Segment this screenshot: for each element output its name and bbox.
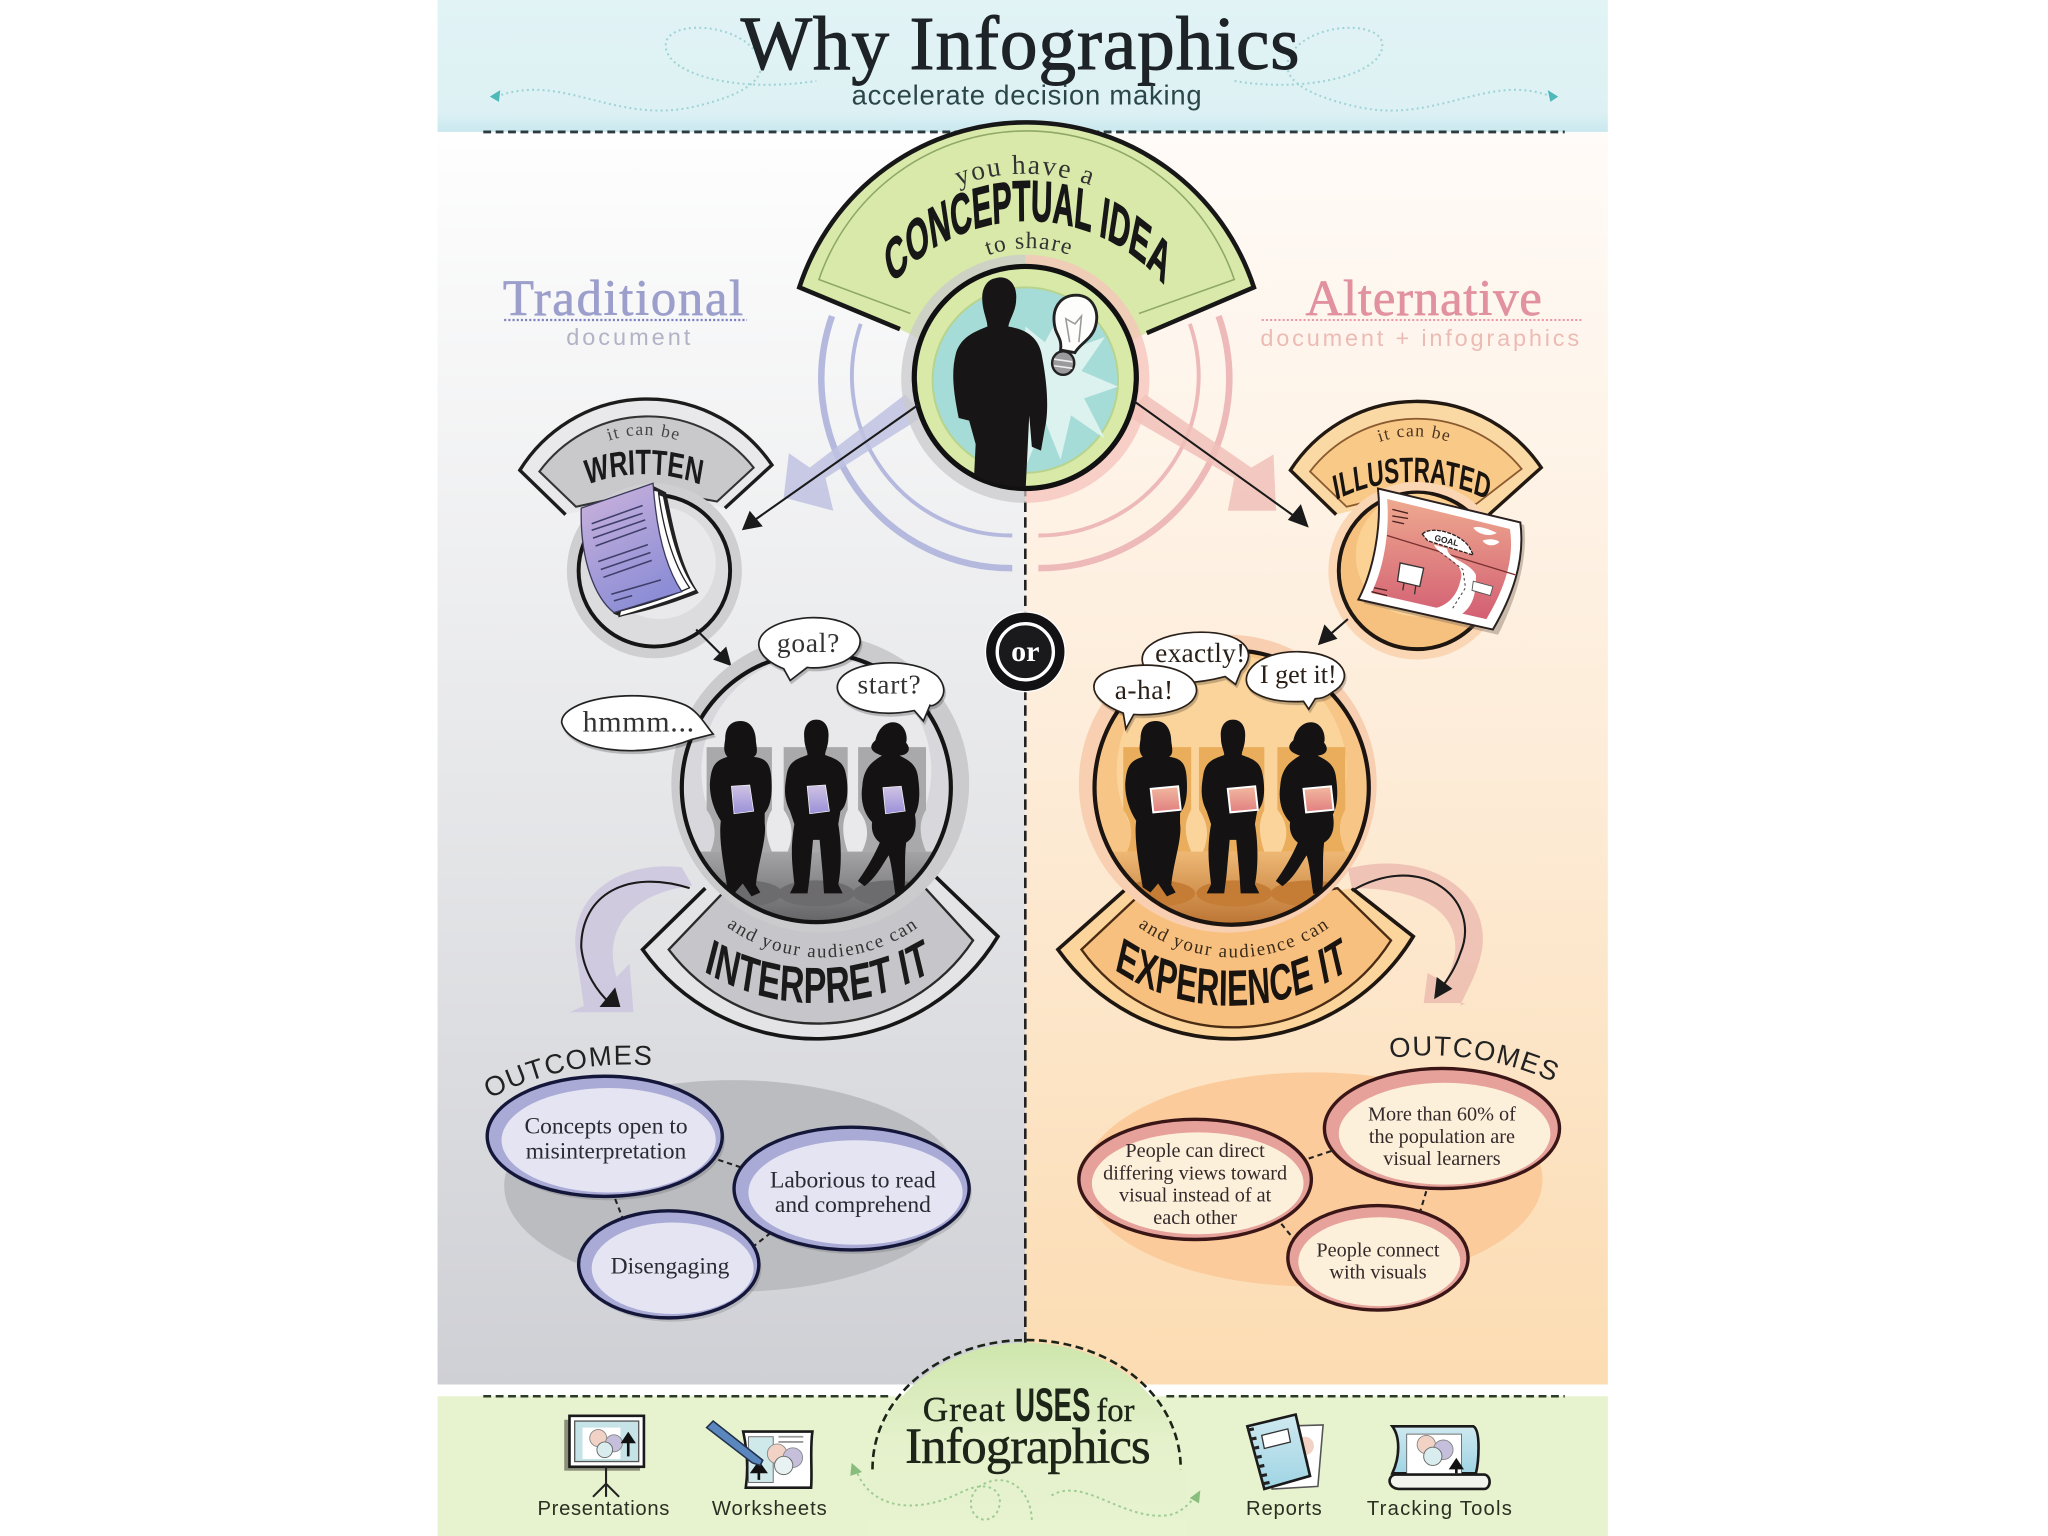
bubble: more than 60 percent xyxy=(1324,1068,1560,1189)
outcomes heading right: OUTCOMES xyxy=(1390,1036,1558,1080)
idea medallion xyxy=(901,255,1149,503)
bubble: concepts xyxy=(487,1076,725,1200)
text: written: WRITTEN xyxy=(583,450,704,484)
seats xyxy=(1123,747,1345,852)
outcomes cluster right xyxy=(1079,1068,1560,1310)
bubble: people connect xyxy=(1288,1206,1468,1310)
sign left xyxy=(1398,563,1424,594)
footer dome xyxy=(850,1340,1200,1536)
decorative header swirl left xyxy=(496,28,816,111)
bubble: people can direct: People can direct xyxy=(1125,1140,1265,1162)
soft curved arrow left xyxy=(569,866,692,1012)
label: tracking tools: Tracking Tools xyxy=(1367,1498,1512,1520)
starburst xyxy=(1025,313,1118,468)
bubble: disengaging xyxy=(579,1211,761,1322)
thin arrow illustrated to audience xyxy=(1318,619,1348,645)
bubble: hmmm xyxy=(562,696,713,751)
person two xyxy=(1202,720,1264,893)
heading: alternative xyxy=(1260,271,1583,351)
bubble: goal xyxy=(759,618,860,680)
bubble: people can direct: visual instead of at xyxy=(1119,1185,1272,1207)
bubble: i get it: I get it! xyxy=(1260,660,1337,689)
icon: reports xyxy=(1247,1415,1323,1489)
books xyxy=(1151,786,1334,812)
icon: tracking tools xyxy=(1390,1426,1490,1489)
bubble: start: start? xyxy=(857,670,922,700)
poster icon xyxy=(1358,488,1525,635)
background panel: traditional xyxy=(438,131,1025,1384)
subtitle: accelerate decision making xyxy=(852,79,1202,110)
header band xyxy=(438,0,1608,132)
heading: traditional: Traditional xyxy=(503,271,743,327)
person one xyxy=(1125,721,1187,896)
written banner xyxy=(518,397,774,516)
bubble: concepts: misinterpretation xyxy=(526,1139,687,1165)
thin arrow right xyxy=(1134,401,1309,528)
text: it can be: it can be xyxy=(607,424,679,440)
bubble: laborious: and comprehend xyxy=(775,1192,931,1218)
person one xyxy=(710,721,772,896)
bubble: more than 60 percent: visual learners xyxy=(1383,1148,1501,1170)
main title: Why Infographics xyxy=(741,2,1300,86)
thin curved arrow right xyxy=(1352,876,1465,999)
text: and your audience can: and your audience can xyxy=(728,920,918,958)
pencil xyxy=(707,1421,763,1465)
heading: traditional: document xyxy=(566,324,691,350)
audience circle traditional xyxy=(666,635,969,933)
written circle xyxy=(567,483,742,658)
bubble: people can direct: differing views toward xyxy=(1103,1162,1287,1184)
thin curved arrow left xyxy=(581,882,690,1007)
label: worksheets: Worksheets xyxy=(712,1498,827,1520)
ripple arcs right xyxy=(1038,316,1229,568)
bubble: people can direct xyxy=(1079,1119,1311,1240)
decorative header swirl right xyxy=(1234,28,1552,111)
text: conceptual idea: CONCEPTUAL IDEA xyxy=(886,180,1168,285)
sign right xyxy=(1472,581,1493,596)
swirl arrowheads xyxy=(850,1463,1200,1503)
bubble: more than 60 percent: the population are xyxy=(1369,1126,1515,1148)
bubble: goal: goal? xyxy=(777,628,840,658)
outcomes heading left: OUTCOMES xyxy=(485,1046,651,1096)
or badge: or xyxy=(1011,635,1039,668)
seats xyxy=(707,747,926,852)
bubble: disengaging: Disengaging xyxy=(611,1253,730,1279)
text: experience it: EXPERIENCE IT xyxy=(1116,937,1342,1006)
soft arrow right xyxy=(1126,394,1276,511)
light bulb xyxy=(1052,295,1097,375)
bubble: people can direct: each other xyxy=(1153,1207,1237,1229)
goal badge xyxy=(1422,530,1473,555)
bubble: i get it xyxy=(1246,652,1344,709)
person three xyxy=(1276,722,1337,894)
heading: traditional xyxy=(503,271,747,350)
person three xyxy=(858,722,919,894)
bubble: exactly: exactly! xyxy=(1155,638,1245,668)
document icon xyxy=(581,483,699,616)
footer heading xyxy=(905,1380,1151,1475)
footer heading: for xyxy=(1096,1393,1135,1429)
text: and your audience can: and your audience can xyxy=(1139,920,1329,958)
ripple arcs left xyxy=(821,316,1012,568)
label: reports: Reports xyxy=(1246,1498,1322,1520)
text: to share: to share xyxy=(984,232,1071,254)
experience banner xyxy=(1056,886,1416,1041)
bubble: people connect: with visuals xyxy=(1329,1262,1427,1284)
heading: alternative: document + infographics xyxy=(1260,325,1579,351)
bubble: people connect: People connect xyxy=(1316,1239,1440,1261)
soft arrow left xyxy=(784,394,925,511)
footer heading: USES xyxy=(1015,1380,1091,1432)
man silhouette xyxy=(953,277,1047,496)
footer heading: Great xyxy=(923,1390,1005,1429)
thin arrow left xyxy=(742,405,918,530)
icon: presentations xyxy=(564,1416,644,1497)
soft curved arrow right xyxy=(1348,863,1483,1006)
bubble: exactly xyxy=(1142,632,1249,684)
audience circle alternative xyxy=(1079,635,1384,933)
text: you have a: you have a xyxy=(954,154,1092,192)
bubble: laborious: Laborious to read xyxy=(770,1167,936,1193)
infographic: why infographics xyxy=(438,0,1608,1536)
or badge xyxy=(985,611,1066,692)
bubble: start xyxy=(837,663,944,721)
road xyxy=(1432,545,1476,616)
bubble: a-ha xyxy=(1094,665,1197,729)
bubble: a-ha: a-ha! xyxy=(1115,675,1174,705)
label: presentations: Presentations xyxy=(537,1498,669,1520)
background panel: alternative xyxy=(1025,131,1608,1384)
poster icon: GOAL xyxy=(1434,533,1460,548)
illustrated circle xyxy=(1328,482,1506,660)
arrowhead right xyxy=(1548,90,1558,102)
text: it can be: it can be xyxy=(1378,425,1450,442)
bubble: more than 60 percent: More than 60% of xyxy=(1368,1104,1516,1126)
person two xyxy=(785,720,847,893)
concept fan xyxy=(796,120,1257,340)
text: illustrated: ILLUSTRATED xyxy=(1332,458,1490,500)
arrowhead left xyxy=(490,90,500,102)
outcomes cluster left xyxy=(487,1076,972,1322)
illustrated banner xyxy=(1288,400,1544,516)
footer band xyxy=(438,1396,1608,1536)
footer heading: Infographics xyxy=(905,1419,1151,1475)
books xyxy=(731,785,905,814)
icon: worksheets xyxy=(707,1421,812,1488)
bubble: concepts: Concepts open to xyxy=(524,1114,688,1140)
text: interpret it: INTERPRET IT xyxy=(706,938,924,1003)
thin arrow written to audience xyxy=(696,630,731,666)
heading: alternative: Alternative xyxy=(1305,271,1542,327)
bubble: hmmm: hmmm... xyxy=(583,705,695,738)
interpret banner xyxy=(640,876,1000,1041)
bubble: laborious xyxy=(734,1127,972,1254)
central dashed divider xyxy=(1024,486,1026,1382)
footer swirl xyxy=(856,1468,1196,1522)
